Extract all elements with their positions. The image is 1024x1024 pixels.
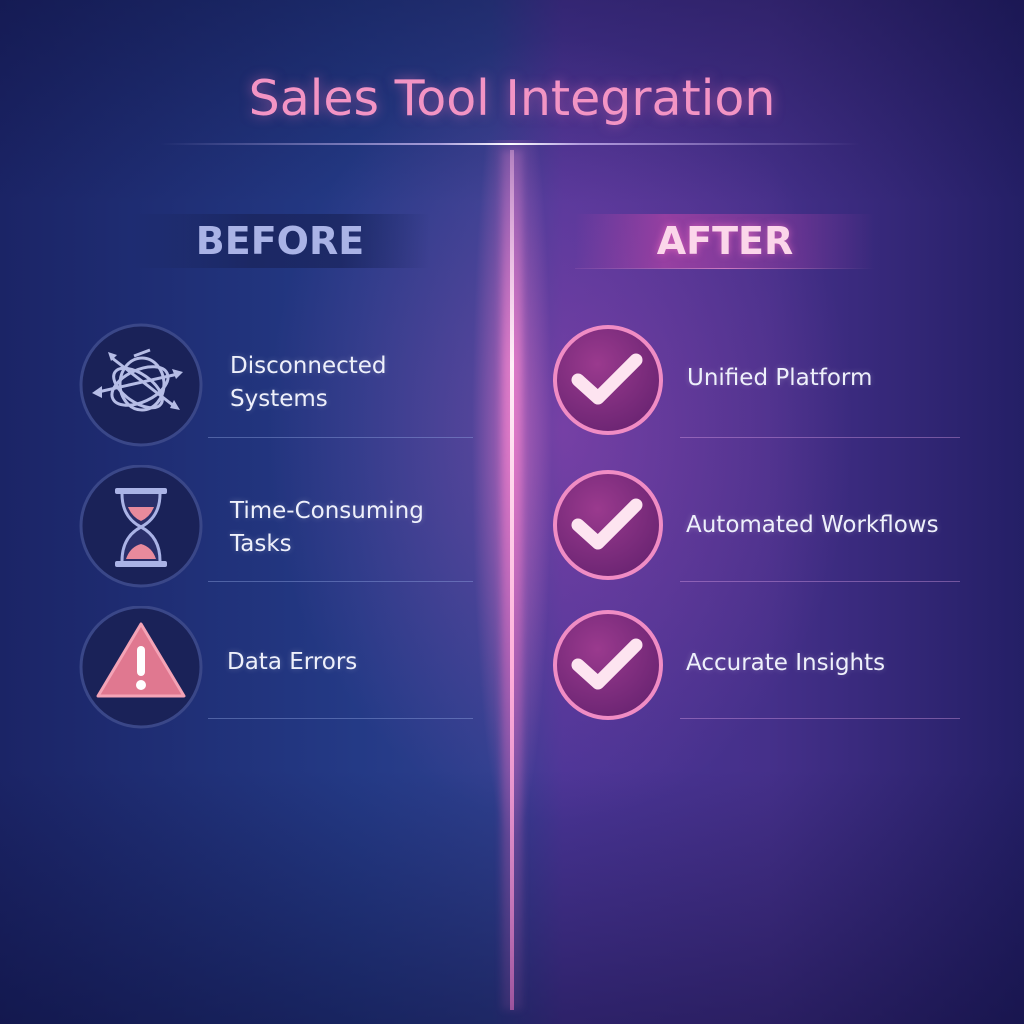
- item: data errors: Data Errors: [227, 649, 357, 675]
- title: Sales Tool Integration: [249, 70, 775, 127]
- item: time-consuming tasks: Tasks: [230, 531, 292, 557]
- item: time-consuming tasks: Time-Consuming: [230, 498, 424, 524]
- item: disconnected systems: Systems: [230, 386, 328, 412]
- heading: before: [130, 214, 430, 268]
- heading: after: AFTER: [657, 219, 793, 263]
- item: disconnected systems: Disconnected: [230, 353, 387, 379]
- item: disconnected systems: [80, 324, 387, 446]
- item: unified platform: [553, 325, 872, 435]
- icon: check: [553, 325, 663, 435]
- icon: tangled arrows: [80, 324, 202, 446]
- item: data errors: [80, 606, 358, 728]
- icon: check: [553, 610, 663, 720]
- item: time-consuming tasks: [80, 465, 424, 588]
- item: accurate insights: Accurate Insights: [686, 650, 885, 676]
- item: automated workflows: [553, 470, 939, 580]
- heading: after: [575, 214, 875, 268]
- item: accurate insights: [553, 610, 885, 720]
- icon: warning triangle: [80, 606, 202, 728]
- center glow line: [472, 140, 552, 1020]
- item: unified platform: Unified Platform: [687, 365, 872, 391]
- item: automated workflows: Automated Workflows: [686, 512, 939, 538]
- icon: check: [553, 470, 663, 580]
- icon: hourglass: [80, 465, 202, 588]
- heading: before: BEFORE: [196, 219, 364, 263]
